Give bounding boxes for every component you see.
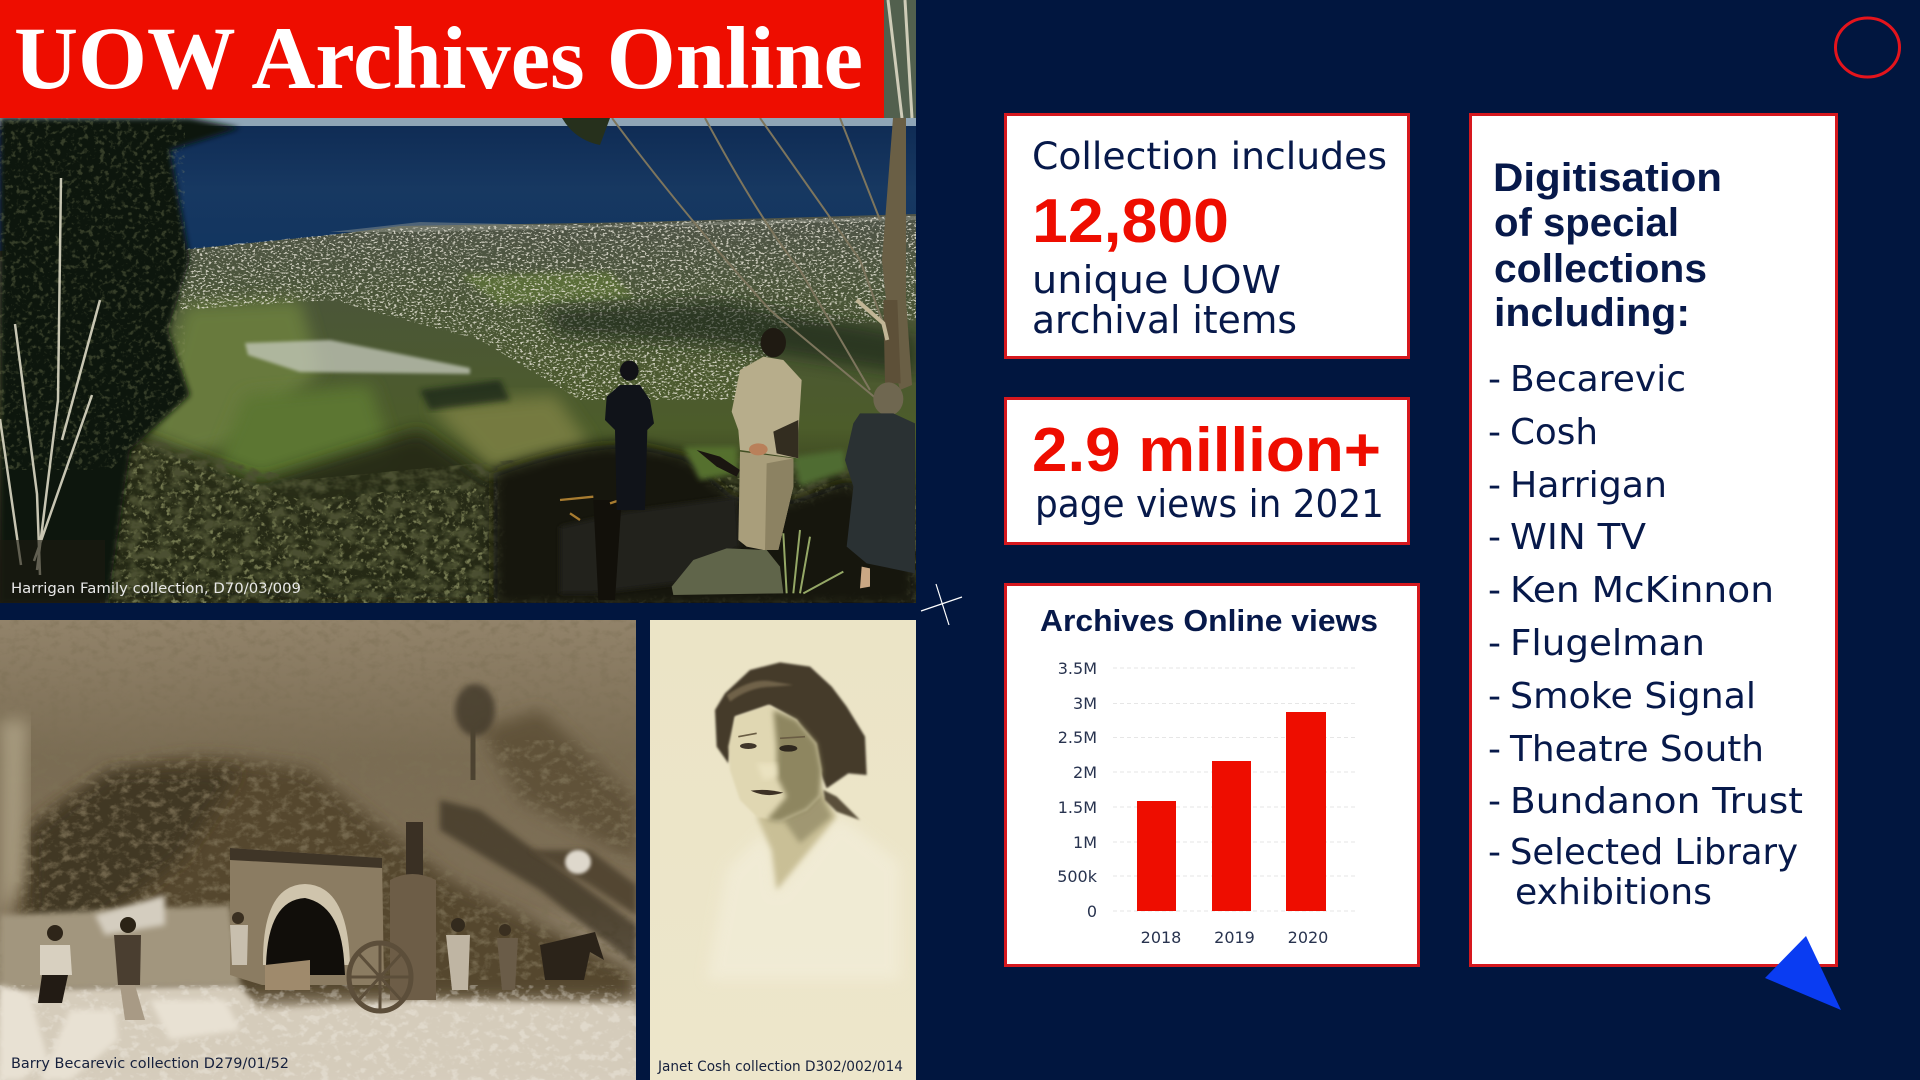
list of collections: - xyxy=(1488,570,1501,611)
list of collections: Smoke Signal xyxy=(1510,676,1756,717)
heading: digitisation of special collections including xyxy=(1493,156,1722,335)
bar chart xyxy=(1057,659,1356,947)
grass xyxy=(783,530,843,593)
palm tree xyxy=(455,684,495,780)
photo: Harrigan Family collection view over Wollongong xyxy=(0,0,916,607)
rock under man xyxy=(672,548,783,595)
text: unique UOW archival items: archival items xyxy=(1032,298,1297,342)
list of collections: - xyxy=(1488,412,1501,453)
list of collections: WIN TV xyxy=(1510,517,1646,558)
list of collections: - xyxy=(1488,676,1501,717)
x axis labels: 2019 xyxy=(1214,928,1255,947)
wheel xyxy=(349,943,411,1011)
list of collections: Flugelman xyxy=(1510,623,1705,664)
bush and ground xyxy=(493,445,915,607)
list of collections: - xyxy=(1488,359,1501,400)
boiler xyxy=(390,822,436,1000)
number: 12,800: 12,800 xyxy=(1032,187,1229,256)
hair xyxy=(715,662,867,788)
x axis labels: 2018 xyxy=(1141,928,1181,947)
list of collections: - xyxy=(1488,623,1501,664)
x axis labels xyxy=(1141,928,1328,947)
horse xyxy=(540,932,604,980)
log slide xyxy=(440,800,636,965)
y axis labels: 3.5M xyxy=(1058,659,1097,678)
neck xyxy=(757,787,837,890)
list of collections: Theatre South xyxy=(1509,729,1764,770)
list of collections: Ken McKinnon xyxy=(1510,570,1774,611)
tunnel: brick arch xyxy=(230,848,384,985)
number: 2.9 million+: 2.9 million+ xyxy=(1032,416,1381,485)
title banner xyxy=(0,0,884,118)
y axis labels xyxy=(1057,659,1098,921)
y axis labels: 500k xyxy=(1057,867,1098,886)
list of collections: - xyxy=(1488,729,1501,770)
photo: Janet Cosh collection portrait xyxy=(650,620,916,1080)
x axis labels: 2020 xyxy=(1288,928,1328,947)
y axis labels: 1M xyxy=(1073,833,1097,852)
caption: Cosh: Janet Cosh collection D302/002/014 xyxy=(657,1059,903,1075)
list of collections: Bundanon Trust xyxy=(1510,781,1803,822)
panel: views chart xyxy=(1006,584,1418,966)
caption: Becarevic: Barry Becarevic collection D279/01/52 xyxy=(11,1056,289,1072)
panel: page views stat xyxy=(1006,398,1408,544)
list of collections: Selected Library xyxy=(1510,832,1798,873)
list of collections xyxy=(1488,359,1803,913)
decoration: red circle xyxy=(1836,18,1900,77)
list of collections: - xyxy=(1488,517,1501,558)
figure: boy xyxy=(605,361,654,510)
photo: Barry Becarevic collection tunnel works xyxy=(0,620,636,1080)
panel: digitisation list xyxy=(1470,114,1836,966)
list of collections: Becarevic xyxy=(1510,359,1686,400)
heading: digitisation of special collections including: Digitisation xyxy=(1493,156,1722,200)
list of collections: Harrigan xyxy=(1510,465,1667,506)
figure: woman xyxy=(845,382,915,588)
ribbon xyxy=(823,790,860,820)
workers xyxy=(38,912,518,1020)
heading: digitisation of special collections including: of special xyxy=(1494,201,1679,245)
figure: man in suit xyxy=(732,328,802,550)
list of collections: exhibitions xyxy=(1515,872,1712,913)
face xyxy=(728,705,822,822)
text: unique UOW archival items xyxy=(1032,258,1297,342)
bar: 2020 xyxy=(1286,712,1326,911)
tree trunk xyxy=(883,300,901,383)
crates xyxy=(265,960,310,990)
text: unique UOW archival items: unique UOW xyxy=(1032,258,1281,302)
panel: collection stat xyxy=(1006,114,1408,358)
list of collections: - xyxy=(1488,832,1501,873)
heading: digitisation of special collections including: including: xyxy=(1494,291,1690,335)
bar: 2018 xyxy=(1137,801,1176,911)
chart heading: Archives Online views xyxy=(1040,603,1378,638)
dress shading xyxy=(712,824,898,976)
y axis labels: 2M xyxy=(1073,763,1097,782)
text: page views in 2021: page views in 2021 xyxy=(1035,482,1384,526)
y axis labels: 2.5M xyxy=(1058,728,1097,747)
list of collections: Cosh xyxy=(1510,412,1598,453)
y axis labels: 1.5M xyxy=(1058,798,1097,817)
decoration: white cross xyxy=(921,584,962,625)
heading: digitisation of special collections including: collections xyxy=(1494,247,1707,291)
list of collections: - xyxy=(1488,781,1501,822)
list of collections: - xyxy=(1488,465,1501,506)
title text: UOW Archives Online xyxy=(14,10,863,108)
decoration: blue triangle xyxy=(1765,936,1841,1010)
text: collection includes: Collection includes xyxy=(1032,135,1387,178)
y axis labels: 0 xyxy=(1087,902,1097,921)
bar: 2019 xyxy=(1212,761,1251,911)
caption: Harrigan: Harrigan Family collection, D70/03/009 xyxy=(11,581,301,597)
y axis labels: 3M xyxy=(1073,694,1097,713)
